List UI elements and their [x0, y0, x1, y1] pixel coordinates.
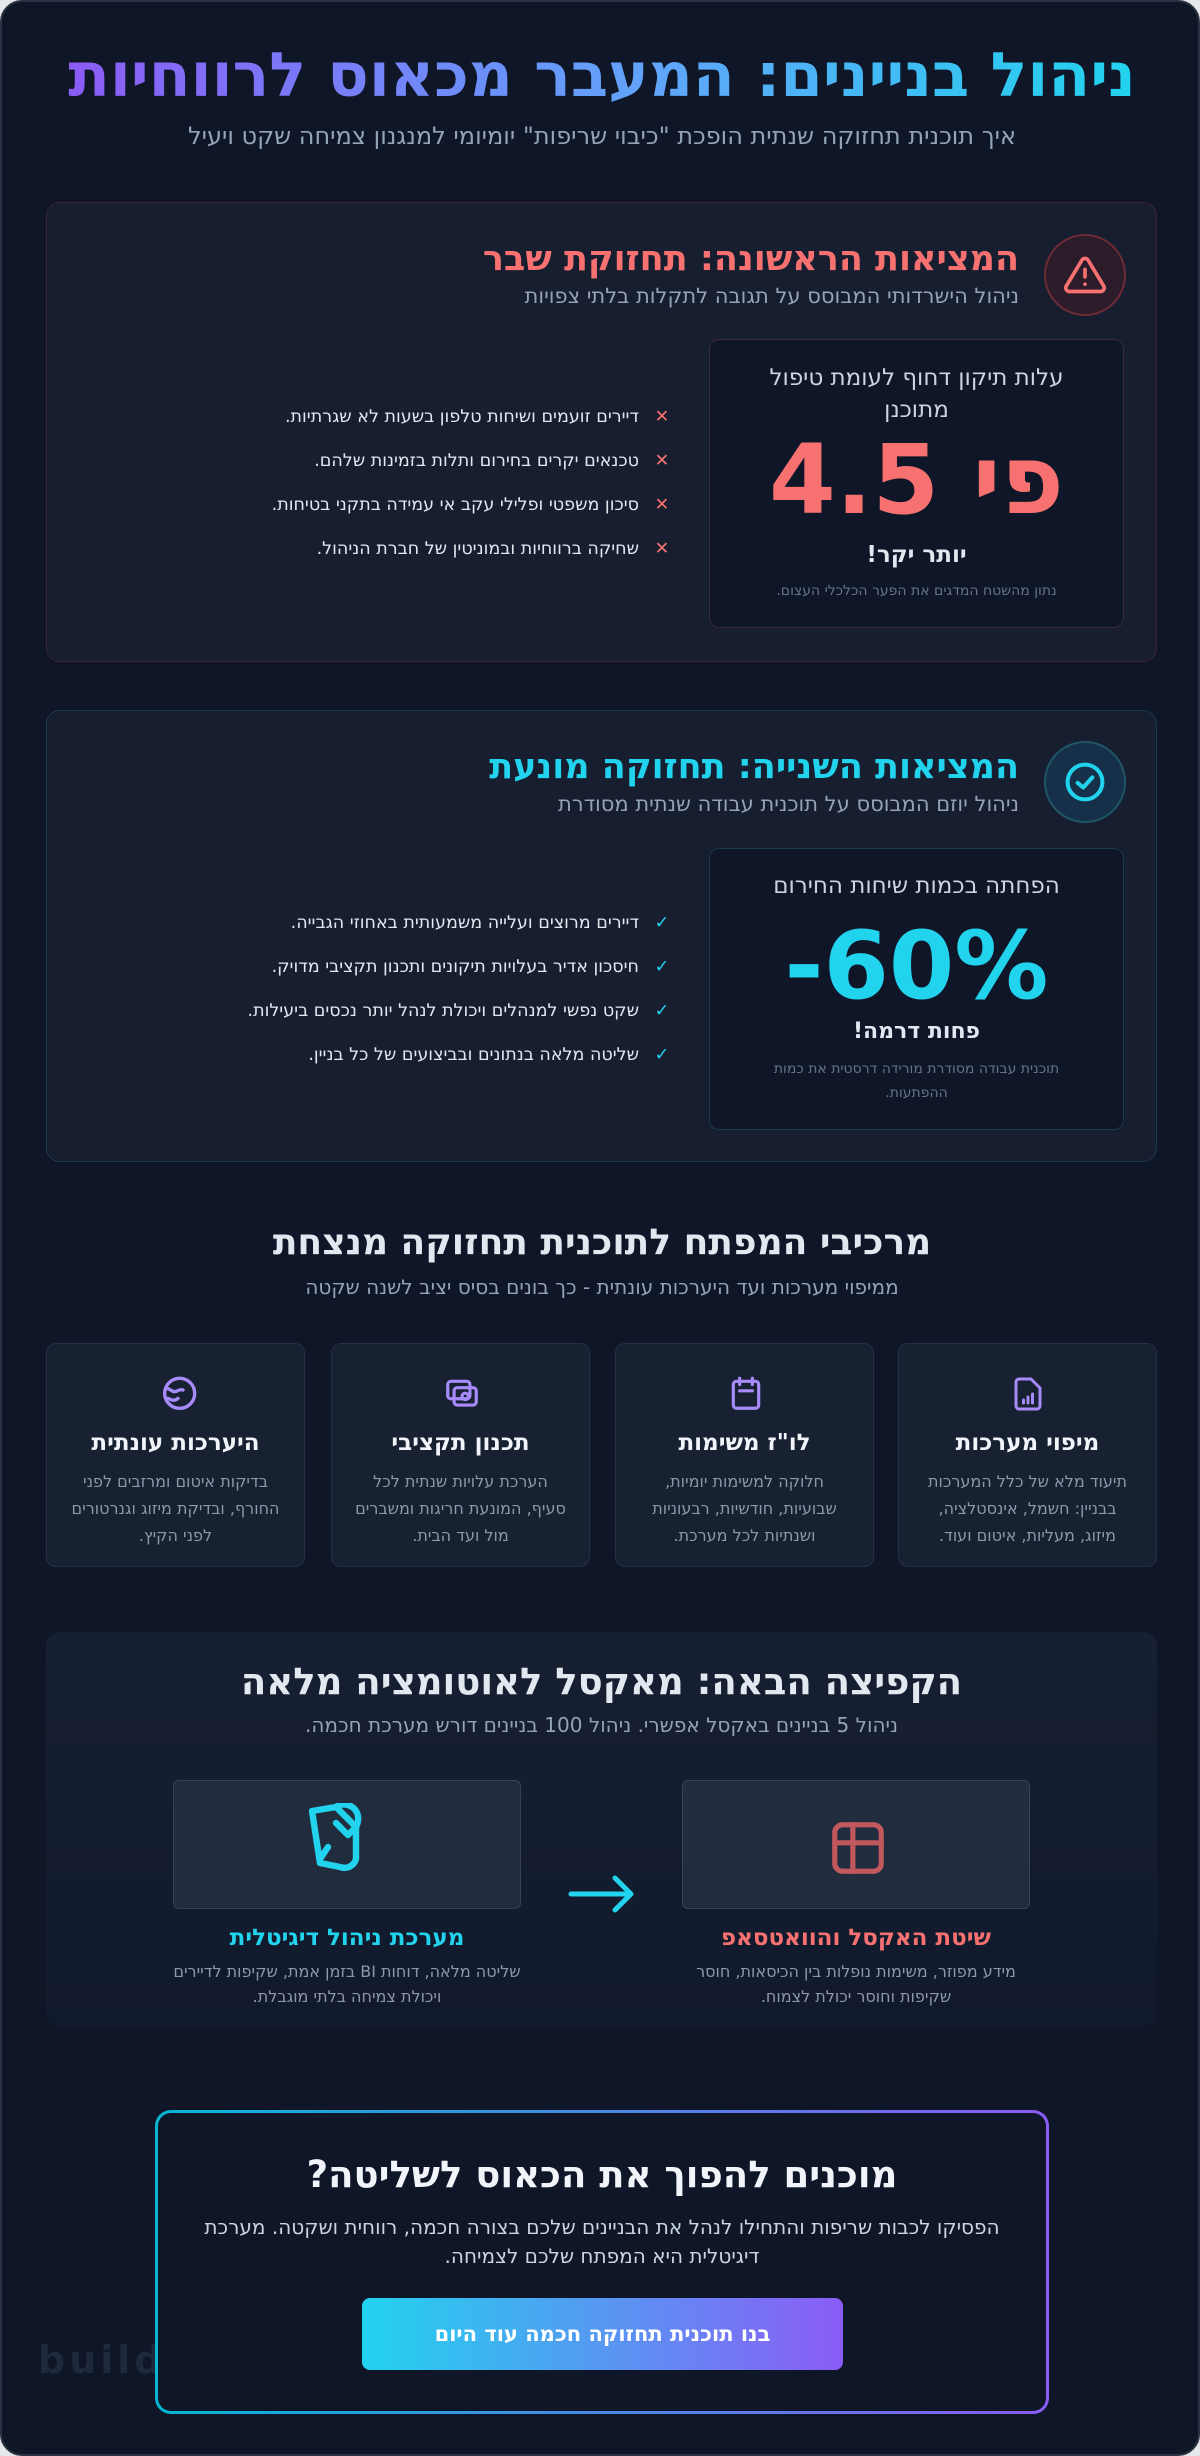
box: excel method: [682, 1780, 1030, 1909]
list: problems: [272, 407, 669, 559]
card: budget planning: הערכת עלויות שנתית לכל סעיף, המונעת חריגות ומשברים מול ועד הבית.: [355, 1472, 566, 1545]
card: task schedule: [615, 1343, 874, 1567]
list: benefits: ✓: [655, 1001, 669, 1021]
list: problems: סיכון משפטי ופלילי עקב אי עמידה בתקני בטיחות.: [272, 495, 639, 515]
label: digital system: [173, 1925, 521, 2006]
watermark: build.app: [38, 2338, 276, 2382]
list: benefits: דיירים מרוצים ועלייה משמעותית באחוזי הגבייה.: [291, 913, 639, 933]
stat box: -60%: -60%: [784, 912, 1048, 1021]
card: seasonal preparation: בדיקות איטום ומרזבים לפני החורף, ובדיקת מיזוג וגנרטורים לפני הקיץ.: [72, 1472, 279, 1545]
panel: preventive maintenance: [46, 710, 1157, 1162]
subtitle: איך תוכנית תחזוקה שנתית הופכת "כיבוי שריפות" יומיומי למנגנון צמיחה שקט ויעיל: [188, 122, 1016, 150]
list: problems: דיירים זועמים ושיחות טלפון בשעות לא שגרתיות.: [285, 407, 639, 427]
heading: המציאות הראשונה: תחזוקת שבר: [483, 239, 1019, 279]
label: digital system: שליטה מלאה, דוחות BI בזמן אמת, שקיפות לדיירים ויכולת צמיחה בלתי מוגבלת.: [173, 1962, 521, 2006]
card: seasonal preparation: היערכות עונתית: [91, 1430, 260, 1456]
stat box: 4.5x: נתון מהשטח המדגים את הפער הכלכלי העצום.: [776, 583, 1057, 599]
list: problems: ✕: [655, 539, 669, 559]
CTA heading: מוכנים להפוך את הכאוס לשליטה?: [307, 2153, 897, 2196]
CTA button: בנו תוכנית תחזוקה חכמה עוד היום: [435, 2322, 770, 2346]
label: excel method: שיטת האקסל והוואטסאפ: [721, 1925, 991, 1951]
stat box: -60%: פחות דרמה!: [853, 1019, 980, 1044]
icon: calendar: [732, 1376, 760, 1410]
stat box: 4.5x: [709, 339, 1124, 628]
panel: reactive maintenance: [46, 202, 1157, 662]
stat box: 4.5x: עלות תיקון דחוף לעומת טיפול מתוכנן: [769, 365, 1064, 423]
list: benefits: [248, 913, 669, 1065]
card: systems mapping: מיפוי מערכות: [956, 1430, 1099, 1456]
arrow: [568, 1876, 634, 1912]
icon: digital: [308, 1803, 362, 1872]
icon: check: [1044, 741, 1126, 823]
icon: money: [446, 1380, 478, 1407]
list: benefits: חיסכון אדיר בעלויות תיקונים ותכנון תקציבי מדויק.: [272, 957, 639, 977]
heading: המציאות השנייה: תחזוקה מונעת: [489, 747, 1019, 787]
stat box: -60%: תוכנית עבודה מסודרת מורידה דרסטית את כמות ההפתעות.: [774, 1061, 1059, 1101]
stat box: -60%: הפחתה בכמות שיחות החירום: [773, 873, 1060, 899]
icon: table: [832, 1822, 884, 1874]
stat box: -60%: [709, 848, 1124, 1130]
list: benefits: ✓: [655, 1045, 669, 1065]
icon: seasons: [163, 1376, 196, 1410]
icon: warning: [1044, 234, 1126, 316]
subheading: ניהול הישרדותי המבוסס על תגובה לתקלות בלתי צפויות: [525, 284, 1019, 308]
card: seasonal preparation: [46, 1343, 305, 1567]
section heading: key components: מרכיבי המפתח לתוכנית תחזוקה מנצחת: [273, 1222, 931, 1263]
label: excel method: [696, 1925, 1016, 2006]
list: problems: ✕: [655, 495, 669, 515]
section subheading: ממיפוי מערכות ועד היערכות עונתית - כך בונים בסיס יציב לשנה שקטה: [305, 1275, 899, 1299]
stat box: 4.5x: יותר יקר!: [866, 542, 967, 568]
icon: document chart: [1014, 1378, 1042, 1410]
card: budget planning: תכנון תקציבי: [391, 1430, 530, 1456]
card: task schedule: לו"ז משימות: [678, 1430, 811, 1456]
CTA button: [362, 2298, 843, 2370]
card: systems mapping: [898, 1343, 1157, 1567]
callout: CTA: [155, 2110, 1049, 2414]
subheading: ניהול יוזם המבוסס על תוכנית עבודה שנתית מסודרת: [558, 792, 1019, 816]
list: benefits: ✓: [655, 957, 669, 977]
panel: next leap: [46, 1632, 1157, 2027]
list: problems: ✕: [655, 407, 669, 427]
stat box: 4.5x: פי 4.5: [769, 424, 1064, 536]
list: problems: ✕: [655, 451, 669, 471]
list: benefits: ✓: [655, 913, 669, 933]
CTA text: הפסיקו לכבות שריפות והתחילו לנהל את הבניינים שלכם בצורה חכמה, רווחית ושקטה. מערכת דיגיטלית היא המפתח שלכם לצמיחה.: [204, 2215, 1000, 2268]
list: problems: טכנאים יקרים בחירום ותלות בזמינות שלהם.: [314, 451, 639, 471]
subheading: ניהול 5 בניינים באקסל אפשרי. ניהול 100 בניינים דורש מערכת חכמה.: [305, 1713, 898, 1737]
card: task schedule: חלוקה למשימות יומיות, שבועיות, חודשיות, רבעוניות ושנתיות לכל מערכת.: [652, 1472, 837, 1545]
list: problems: שחיקה ברווחיות ובמוניטין של חברת הניהול.: [317, 539, 639, 559]
list: benefits: שליטה מלאה בנתונים ובביצועים של כל בניין.: [308, 1045, 639, 1065]
box: digital system: [173, 1780, 521, 1909]
label: excel method: מידע מפוזר, משימות נופלות בין הכיסאות, חוסר שקיפות וחוסר יכולת לצמוח.: [696, 1962, 1016, 2006]
label: digital system: מערכת ניהול דיגיטלית: [230, 1925, 464, 1951]
heading: הקפיצה הבאה: מאקסל לאוטומציה מלאה: [241, 1660, 962, 1703]
list: benefits: שקט נפשי למנהלים ויכולת לנהל יותר נכסים ביעילות.: [248, 1001, 639, 1021]
card: budget planning: [331, 1343, 590, 1567]
title: ניהול בניינים: המעבר מכאוס לרווחיות: [68, 40, 1136, 111]
card: systems mapping: תיעוד מלא של כלל המערכות בבניין: חשמל, אינסטלציה, מיזוג, מעליות, איטום ועוד.: [928, 1472, 1127, 1545]
